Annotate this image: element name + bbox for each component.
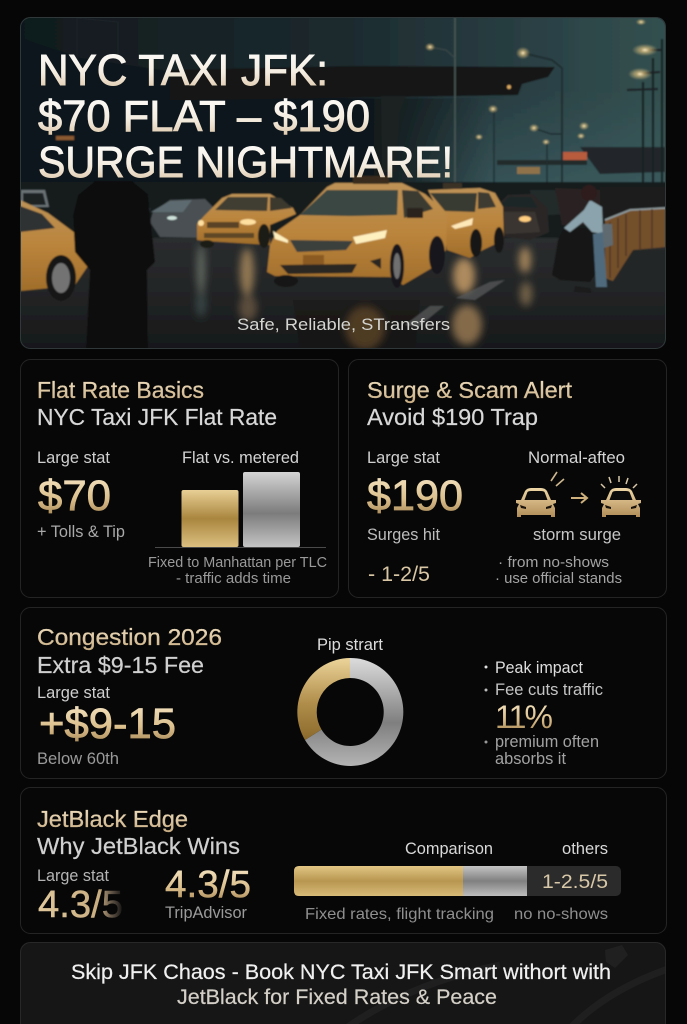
list: peak impact: 11% — [495, 699, 553, 735]
note: surges hit: Surges hit — [367, 526, 440, 544]
panel: call to action — [20, 942, 680, 1024]
caption: comparison notes: no no-shows — [514, 906, 608, 923]
dark strip behind cars — [20, 182, 666, 240]
stat: $70: $70 — [38, 472, 111, 520]
subheading: extra fee: Extra $9-15 Fee — [37, 652, 204, 678]
taxi far left — [20, 200, 90, 291]
caption: no-show tips: · from no-shows — [498, 554, 609, 571]
taxi left gold — [197, 194, 296, 245]
hero photo: rainy taxi rank at dusk — [20, 17, 666, 350]
hero title: NYC TAXI JFK: — [38, 46, 328, 95]
list: peak impact: Fee cuts traffic — [495, 681, 603, 699]
hero title: $70 FLAT – $190 — [38, 92, 370, 141]
taxi rear right — [428, 188, 504, 258]
caption: comparison notes — [305, 906, 608, 923]
main taxi — [267, 183, 447, 285]
overpass — [170, 66, 555, 100]
panel: jetblack edge — [20, 788, 666, 934]
hero panel — [20, 17, 666, 350]
dark buildings left — [21, 49, 170, 98]
stat: surge rating: - 1-2/5 — [368, 563, 430, 586]
crowd and fence — [636, 207, 637, 208]
note: below 60th: Below 60th — [37, 750, 119, 768]
bar chart: flat vs metered: Flat vs. metered — [182, 449, 299, 467]
call to action text — [71, 960, 611, 1009]
wet road — [20, 238, 666, 349]
caption: comparison notes: Fixed rates, flight tracking — [305, 906, 494, 923]
heading: flat rate basics: Flat Rate Basics — [37, 377, 204, 403]
donut chart — [297, 636, 403, 766]
caption: fixed rate note: - traffic adds time — [176, 570, 291, 587]
hero subtitle: Safe, Reliable, STransfers — [237, 315, 450, 334]
label: large stat: Large stat — [37, 684, 110, 702]
list: peak impact — [484, 659, 603, 768]
comparison bar — [294, 840, 621, 896]
right canopy and signs — [497, 160, 587, 165]
caption: fixed rate note: Fixed to Manhattan per TLC — [148, 554, 327, 571]
hero title — [38, 54, 450, 178]
label: large stat: Large stat — [37, 867, 109, 885]
far dark cars right — [530, 190, 560, 216]
caption: fixed rate note — [148, 554, 327, 587]
lamp posts — [454, 17, 456, 185]
label: normal after: Normal-afteo — [528, 449, 625, 467]
subheading: why jetblack wins: Why JetBlack Wins — [37, 833, 240, 859]
silver car — [150, 199, 216, 238]
donut chart: Pip strart — [317, 636, 383, 654]
stat: $190: $190 — [367, 472, 463, 520]
subheading: flat rate: NYC Taxi JFK Flat Rate — [37, 404, 277, 430]
panel: surge and scam alert — [348, 360, 666, 598]
caption: no-show tips: · use official stands — [495, 570, 622, 587]
label: large stat: Large stat — [367, 449, 440, 467]
panel: flat rate basics — [20, 360, 338, 598]
hero title: SURGE NIGHTMARE! — [38, 138, 453, 187]
call to action text: JetBlack for Fixed Rates & Peace — [177, 985, 497, 1009]
caption: no-show tips — [495, 554, 622, 587]
heading: surge and scam alert: Surge & Scam Alert — [367, 377, 573, 403]
stat: tripadvisor rating: 4.3/5 — [165, 864, 251, 906]
list: peak impact: premium often — [495, 733, 599, 751]
comparison bar: others — [562, 840, 608, 858]
list: peak impact: Peak impact — [495, 659, 583, 677]
heading: congestion 2026: Congestion 2026 — [37, 624, 222, 650]
label: large stat: Large stat — [37, 449, 110, 467]
label: storm surge: storm surge — [533, 526, 621, 544]
label: tripadvisor: TripAdvisor — [165, 904, 248, 922]
silhouette of person — [73, 181, 155, 349]
icon: normal car to surge car — [516, 472, 641, 517]
road reflections — [196, 244, 532, 350]
note: tolls and tip: + Tolls & Tip — [37, 523, 125, 541]
bar chart: flat vs metered — [155, 449, 326, 548]
comparison bar: 1-2.5/5 — [542, 872, 608, 893]
small white car far left — [21, 190, 49, 207]
comparison bar: Comparison — [405, 840, 493, 858]
panel: congestion 2026 — [20, 608, 666, 778]
stat: faded rating: 4.3/5 — [38, 884, 123, 926]
heading: jetblack edge: JetBlack Edge — [37, 806, 188, 832]
call to action text: Skip JFK Chaos - Book NYC Taxi JFK Smart withort with — [71, 960, 611, 984]
subheading: avoid trap: Avoid $190 Trap — [367, 404, 538, 430]
stat: +$9-15: +$9-15 — [39, 700, 176, 748]
list: peak impact: absorbs it — [495, 750, 566, 768]
